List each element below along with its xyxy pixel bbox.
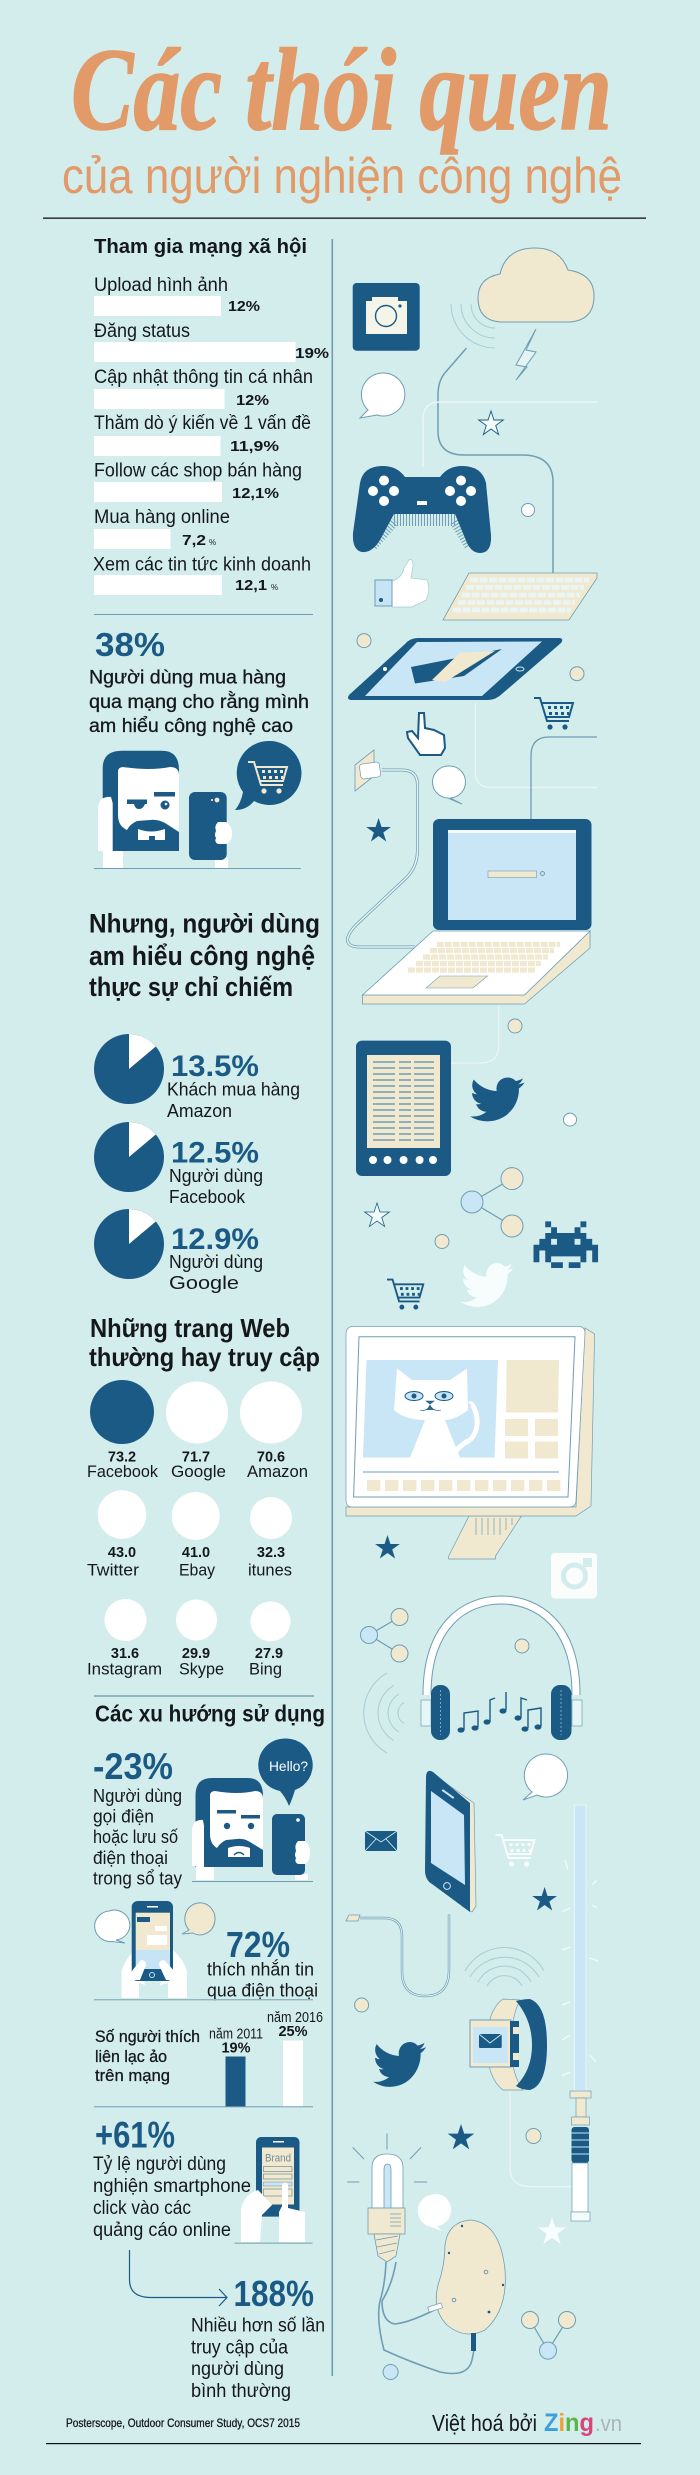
stat: 188%: Nhiều hơn số lần: [191, 2316, 325, 2337]
icon: USB cable: [346, 1914, 449, 1996]
panel: social network bars: 7,2: [182, 532, 206, 549]
bar chart: online contact: liên lạc ảo: [95, 2047, 167, 2066]
icon: pointer hand: [407, 713, 445, 755]
bar chart: online contact: 25%: [278, 2024, 308, 2040]
icon: cat: [394, 1368, 477, 1458]
heading: tech-savvy users: thực sự chỉ chiếm: [89, 972, 293, 1002]
bubble chart: websites: Google: [171, 1462, 226, 1481]
bubble chart: websites: 31.6: [111, 1646, 139, 1662]
subtitle: của người nghiện công nghệ: [62, 148, 622, 204]
stat: -23%: hoặc lưu số: [93, 1827, 178, 1847]
panel: social network bars: 11,9%: [230, 438, 279, 455]
pie: Facebook 12.5%: 12.5%: [171, 1136, 259, 1170]
heading: tech-savvy users: am hiểu công nghệ: [89, 941, 315, 971]
pie: Facebook 12.5%: Facebook: [169, 1187, 246, 1207]
icon: lightning bolt: [516, 329, 536, 380]
panel: social network bars: 19%: [295, 345, 329, 362]
heading: most visited websites: Những trang Web: [90, 1313, 290, 1343]
bar chart: online contact: năm 2016: [267, 2010, 323, 2026]
bubble chart: websites: Facebook: [87, 1462, 158, 1481]
heading: tech-savvy users: Nhưng, người dùng: [89, 908, 320, 938]
bubble chart: websites: Twitter: [87, 1560, 139, 1580]
bar chart: online contact: năm 2011: [209, 2027, 263, 2043]
stat: -23%: điện thoại: [93, 1848, 168, 1868]
right column illustrations: [346, 248, 598, 2380]
icon: potato: [428, 2220, 505, 2351]
stat: +61%: [93, 2114, 251, 2241]
title: [62, 24, 622, 204]
stat: 38%: Người dùng mua hàng: [89, 668, 286, 688]
pie: Amazon 13.5%: 13.5%: [171, 1050, 259, 1083]
panel: social network bars: 12%: [228, 298, 260, 315]
cable lines, top: [438, 348, 553, 573]
stat: 72%: [207, 1924, 318, 2000]
pie: Facebook 12.5%: [94, 1122, 263, 1207]
panel: social network bars: Mua hàng online: [94, 507, 230, 528]
panel: social network bars: [93, 236, 329, 595]
icon: blue star: [448, 2124, 474, 2149]
panel: social network bars: 12,1: [235, 577, 267, 594]
icon: white Twitter bird: [461, 1263, 513, 1307]
icon: chat bubble: [360, 373, 405, 418]
stat: 38%: am hiểu công nghệ cao: [89, 716, 293, 737]
bubble chart: websites: [87, 1380, 308, 1679]
arrow: [130, 2250, 227, 2306]
stat: 72%: thích nhắn tin: [207, 1959, 314, 1980]
heading: tech-savvy users: [89, 908, 320, 1002]
credit: [432, 2409, 622, 2437]
lines behind tablet: [476, 703, 597, 788]
pie: Google 12.9%: [94, 1209, 263, 1293]
icon: Instagram: [551, 1553, 597, 1598]
bubble chart: websites: 41.0: [182, 1545, 210, 1561]
icon: monitor with cat: [346, 1326, 595, 1559]
icon: wifi arcs: [465, 1948, 544, 1986]
pie: Amazon 13.5%: Khách mua hàng: [167, 1080, 300, 1100]
icon: tablet with paper plane: [348, 638, 562, 700]
illustration: phone with Brand ad: [241, 2137, 305, 2242]
heading: social network: Tham gia mạng xã hội: [94, 236, 307, 258]
bar chart: online contact: 19%: [221, 2041, 251, 2057]
panel: social network bars: Xem các tin tức kinh doanh: [93, 554, 311, 576]
icon: chat bubble: [432, 766, 466, 804]
credit: .vn: [595, 2411, 622, 2436]
bubble chart: websites: 29.9: [182, 1646, 210, 1662]
icon: star outline: [479, 411, 503, 435]
bubble chart: websites: 43.0: [108, 1545, 136, 1561]
icon: share nodes: [360, 1608, 408, 1662]
icon: share nodes: [522, 2312, 576, 2359]
panel: social network bars: %: [271, 583, 278, 592]
icon: beige chat bubble: [182, 1903, 215, 1935]
stat: 38%: qua mạng cho rằng mình: [89, 691, 309, 713]
stat: 188%: người dùng: [191, 2359, 284, 2380]
icon: bulb cables: [379, 2262, 474, 2374]
panel: social network bars: Thăm dò ý kiến về 1 vấn đề: [94, 413, 311, 434]
icon: headphones: [421, 1600, 582, 1740]
source: Posterscope, Outdoor Consumer Study, OCS7 2015: [66, 2416, 300, 2430]
stat: +61%: +61%: [95, 2114, 175, 2156]
heading: usage trends: Các xu hướng sử dụng: [95, 1700, 325, 1726]
pie: Google 12.9%: Người dùng: [169, 1252, 263, 1272]
icon: share nodes: [461, 1168, 523, 1237]
icon: Twitter bird: [373, 2042, 426, 2087]
icon: camera tile: [353, 283, 420, 351]
icon: lightsaber: [562, 1805, 598, 2221]
stat: -23%: gọi điện: [93, 1807, 154, 1827]
stat: 188%: 188%: [234, 2273, 314, 2314]
pie: Facebook 12.5%: Người dùng: [169, 1166, 263, 1186]
icon: gamepad: [353, 466, 491, 553]
icon: laptop: [362, 819, 592, 1004]
icon: dark cart: [387, 1280, 423, 1310]
stat: 188%: [191, 2273, 325, 2402]
icon: white cart: [496, 1835, 534, 1867]
illustration: phone with Brand ad: Brand: [265, 2153, 291, 2165]
icon: cart outline: [534, 698, 573, 730]
bar chart: online contact: [95, 2010, 323, 2106]
bar chart: online contact: Số người thích: [95, 2027, 200, 2046]
callout: Hello bubble: Hello?: [269, 1758, 308, 1774]
stat: 38%: 38%: [95, 626, 165, 663]
stat: -23%: trong sổ tay: [93, 1869, 182, 1889]
illustration: man with phone and Hello bubble: [192, 1738, 313, 1880]
stat: -23%: Người dùng: [93, 1786, 182, 1806]
illustration: man with phone and cart bubble: [98, 741, 301, 868]
stat: 72%: qua điện thoại: [207, 1980, 318, 2000]
panel: social network bars: 12%: [236, 392, 269, 409]
pie: Amazon 13.5%: [94, 1034, 300, 1121]
icon: thumbs up: [375, 560, 429, 607]
stat: +61%: nghiện smartphone: [93, 2176, 251, 2197]
bubble chart: websites: 27.9: [255, 1646, 283, 1662]
bubble chart: websites: Skype: [179, 1660, 224, 1679]
icon: chat bubble: [418, 2194, 451, 2231]
panel: social network bars: Đăng status: [94, 321, 190, 342]
bubble chart: websites: 71.7: [182, 1450, 210, 1466]
bubble chart: websites: Instagram: [87, 1660, 162, 1679]
stat: -23%: -23%: [93, 1746, 173, 1787]
panel: social network bars: Follow các shop bán hàng: [94, 460, 302, 482]
callout: Hello bubble: [258, 1738, 313, 1806]
icon: keyboard: [443, 573, 597, 620]
stat: 188%: bình thường: [191, 2381, 291, 2402]
icon: wall plug and cable: [348, 750, 418, 947]
icon: signal arcs: [451, 304, 495, 348]
bubble chart: websites: Ebay: [179, 1560, 215, 1580]
pie: Google 12.9%: 12.9%: [171, 1223, 259, 1256]
icon: music notes: [458, 1692, 542, 1733]
stat: 38%: [89, 626, 309, 737]
icon: Twitter bird: [470, 1077, 524, 1121]
stat: 188%: truy cập của: [191, 2338, 288, 2359]
panel: social network bars: %: [209, 538, 216, 547]
bubble chart: websites: 32.3: [257, 1545, 285, 1561]
icon: phone perspective: [425, 1771, 476, 1912]
bubble chart: websites: 70.6: [257, 1450, 285, 1466]
icon: cloud: [478, 248, 594, 322]
bubble chart: websites: itunes: [248, 1560, 292, 1580]
stat: +61%: click vào các: [93, 2198, 191, 2219]
heading: most visited websites: [89, 1313, 320, 1372]
credit: Zing: [544, 2409, 594, 2437]
pie: Google 12.9%: Google: [169, 1273, 239, 1293]
bubble chart: websites: Amazon: [247, 1462, 308, 1481]
bubble chart: websites: 73.2: [108, 1450, 136, 1466]
icon: blue star: [532, 1887, 557, 1911]
panel: social network bars: Cập nhật thông tin cá nhân: [94, 367, 313, 388]
credit: Việt hoá bởi: [432, 2410, 537, 2436]
bar chart: online contact: trên mạng: [95, 2066, 170, 2085]
stat: -23%: [93, 1746, 182, 1889]
icon: sound arcs: [364, 1673, 404, 1753]
icon: envelope: [365, 1831, 397, 1851]
icon: space invader: [534, 1221, 598, 1268]
stat: +61%: Tỷ lệ người dùng: [93, 2154, 226, 2175]
stat: +61%: quảng cáo online: [93, 2220, 231, 2241]
icon: smartwatch: [470, 1999, 547, 2090]
icon: blue star: [366, 818, 391, 842]
illustration: texting on phone: [95, 1901, 215, 1998]
panel: social network bars: Upload hình ảnh: [94, 275, 228, 296]
icon: chat bubble: [523, 1754, 568, 1800]
icon: blue star: [375, 1535, 400, 1559]
icon: white star: [538, 2217, 566, 2244]
icon: e-reader: [356, 1041, 451, 1176]
icon: cart bubble: [235, 741, 301, 810]
icon: white star: [365, 1203, 389, 1227]
bubble chart: websites: Bing: [249, 1660, 282, 1679]
heading: most visited websites: thường hay truy cập: [89, 1342, 320, 1372]
icon: light bulb: [347, 2134, 427, 2262]
stat: 72%: 72%: [226, 1924, 290, 1965]
pie: Amazon 13.5%: Amazon: [167, 1101, 232, 1121]
icon: white chat bubble: [95, 1910, 130, 1943]
panel: social network bars: 12,1%: [232, 485, 279, 502]
